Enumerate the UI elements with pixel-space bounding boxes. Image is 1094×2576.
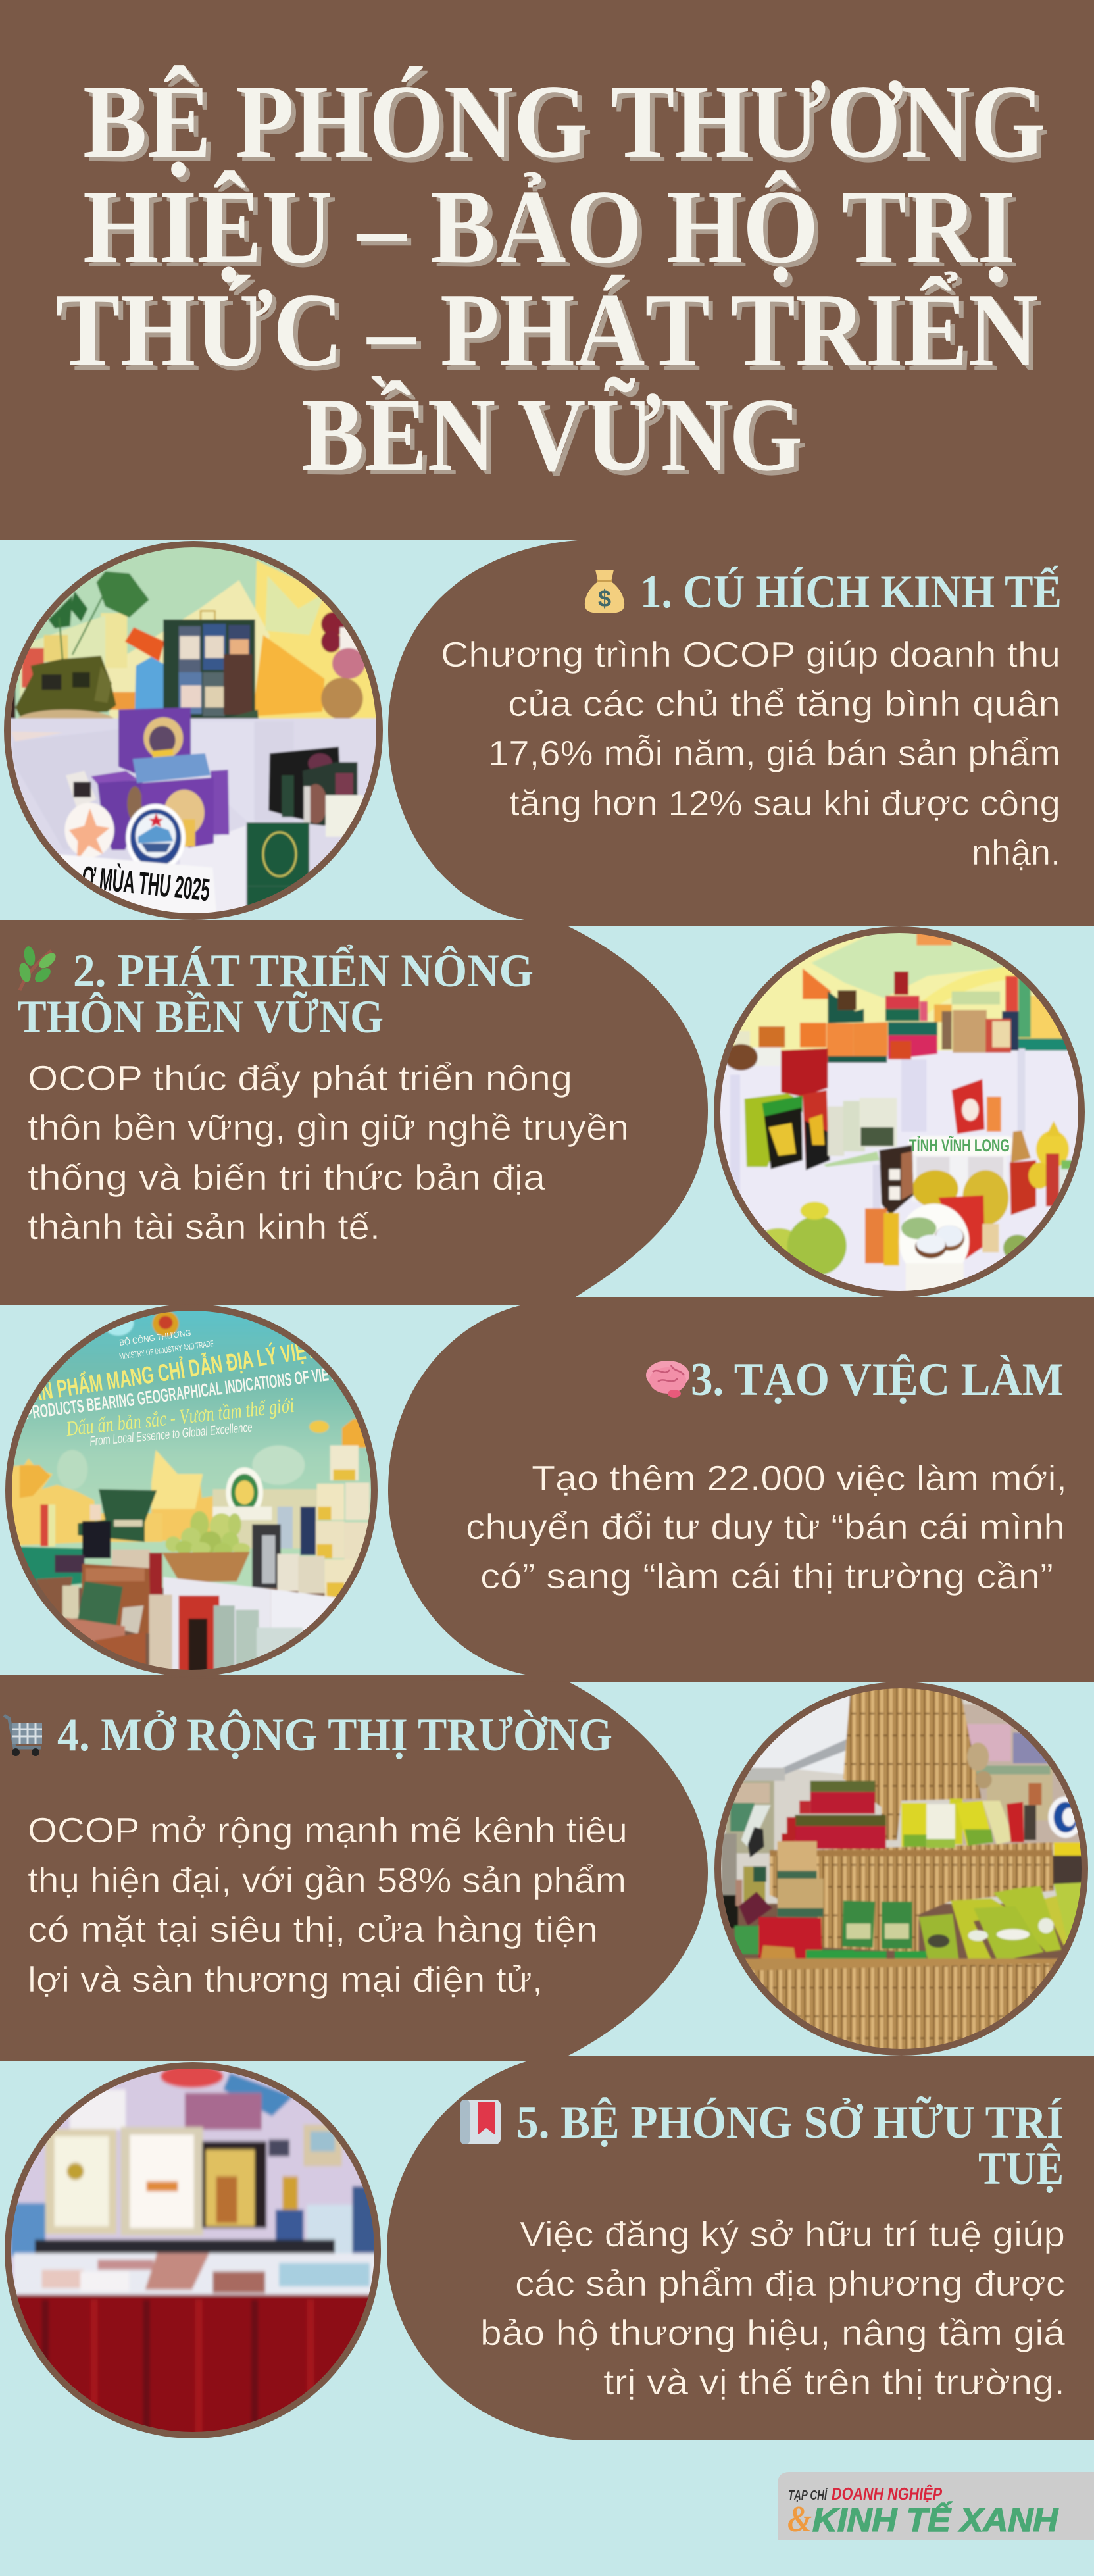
icon: leaf sprig xyxy=(17,946,59,990)
panel: section 5 intellectual property xyxy=(0,2059,1094,2442)
body text 2: thôn bền vững, gìn giữ nghề truyền xyxy=(28,1108,629,1148)
body text 1: nhận. xyxy=(972,833,1060,872)
title: THỨC – PHÁT TRIỂN xyxy=(55,270,1038,388)
photo 3 banner text xyxy=(24,1328,336,1449)
heading 3: 3. TẠO VIỆC LÀM xyxy=(691,1353,1064,1405)
band divider 2 xyxy=(0,1297,1094,1305)
photo 2 sign text: TỈNH VĨNH LONG xyxy=(909,1134,1010,1155)
body text 5 xyxy=(480,2215,1066,2402)
body text 2 xyxy=(28,1059,629,1247)
photo 3 banner text: ẢN PHẨM MANG CHỈ DẪN ĐỊA LÝ VIỆT xyxy=(28,1335,317,1407)
photo 1 sign text: Ơ MÙA THU 2025 xyxy=(80,859,212,908)
body text 4: OCOP mở rộng mạnh mẽ kênh tiêu xyxy=(28,1811,628,1850)
text pill 1 xyxy=(388,540,1094,920)
title band xyxy=(0,0,1094,540)
body text 3: Tạo thêm 22.000 việc làm mới, xyxy=(532,1459,1067,1498)
body text 3 xyxy=(466,1459,1067,1596)
photo 4: bamboo tower display xyxy=(712,1682,1094,2075)
text pill 4 xyxy=(0,1676,708,2056)
title: BỀN VỮNG xyxy=(306,380,807,497)
photo 3 banner text: BỘ CÔNG THƯƠNG xyxy=(118,1328,191,1348)
title: HIỆU – BẢO HỘ TRỊ xyxy=(83,168,1015,285)
title: HIỆU – BẢO HỘ TRỊ xyxy=(87,172,1020,290)
body text 1: 17,6% mỗi năm, giá bán sản phẩm xyxy=(488,734,1060,773)
body text 5: bảo hộ thương hiệu, nâng tầm giá xyxy=(480,2313,1066,2353)
body text 3: chuyển đổi tư duy từ “bán cái mình xyxy=(466,1507,1065,1547)
heading 5: TUỆ xyxy=(978,2142,1064,2194)
heading 5: 5. BỆ PHÓNG SỞ HỮU TRÍ xyxy=(516,2096,1064,2148)
heading 2: 2. PHÁT TRIỂN NÔNG xyxy=(73,944,534,997)
body text 5: các sản phẩm địa phương được xyxy=(515,2264,1065,2304)
body text 1: của các chủ thể tăng bình quân xyxy=(508,684,1060,724)
body text 4: lợi và sàn thương mại điện tử, xyxy=(28,1960,543,2000)
logo: Kinh te Xanh magazine: & xyxy=(787,2499,812,2540)
body text 1: tăng hơn 12% sau khi được công xyxy=(509,784,1060,823)
body text 1: Chương trình OCOP giúp doanh thu xyxy=(441,635,1060,674)
photo 3: geographical indications booth xyxy=(0,1303,388,1693)
body text 4: thụ hiện đại, với gần 58% sản phẩm xyxy=(28,1861,626,1900)
body text 3: có” sang “làm cái thị trường cần” xyxy=(480,1557,1053,1596)
panel: section 2 sustainable rural development xyxy=(0,926,1094,1314)
heading 2 xyxy=(17,944,534,1043)
icon: shopping cart xyxy=(4,1715,42,1756)
photo 5: certificates table xyxy=(0,2059,391,2442)
logo: Kinh te Xanh magazine: DOANH NGHIỆP xyxy=(832,2484,943,2504)
icon: book with bookmark xyxy=(460,2100,501,2144)
icon: brain xyxy=(646,1361,689,1398)
text pill 2 xyxy=(0,926,708,1297)
title xyxy=(55,63,1050,497)
logo: Kinh te Xanh magazine: TẠP CHÍ xyxy=(788,2488,829,2503)
photo 3 banner text: Dấu ấn bản sắc - Vươn tầm thế giới xyxy=(64,1393,295,1440)
panel: section 3 job creation xyxy=(0,1303,1094,1693)
body text 4 xyxy=(28,1811,628,2000)
icon: money bag xyxy=(585,570,624,613)
title: THỨC – PHÁT TRIỂN xyxy=(60,275,1043,393)
text pill 5 xyxy=(387,2061,1094,2440)
body text 1 xyxy=(441,635,1060,872)
heading 5 xyxy=(460,2096,1064,2194)
body text 2: thành tài sản kinh tế. xyxy=(28,1207,380,1247)
body text 2: thống và biến tri thức bản địa xyxy=(28,1158,546,1198)
panel: section 1 economic boost xyxy=(0,536,1094,926)
band divider 3 xyxy=(0,1675,1094,1682)
photo 3 banner text: PRODUCTS BEARING GEOGRAPHICAL INDICATIONS OF VIET xyxy=(24,1363,336,1423)
title: BỀN VỮNG xyxy=(301,375,803,493)
icon: money bag: $ xyxy=(598,585,611,612)
photo 3 banner text: From Local Essence to Global Excellence xyxy=(89,1420,253,1449)
text pill 3 xyxy=(388,1305,1094,1675)
body text 5: Việc đăng ký sở hữu trí tuệ giúp xyxy=(520,2215,1065,2254)
logo: Kinh te Xanh magazine: KINH TẾ XANH xyxy=(812,2502,1058,2538)
body text 5: trị và vị thế trên thị trường. xyxy=(603,2363,1065,2402)
body text 4: có mặt tại siêu thị, cửa hàng tiện xyxy=(28,1910,598,1950)
heading 4: 4. MỞ RỘNG THỊ TRƯỜNG xyxy=(57,1709,612,1761)
panel: section 4 market expansion xyxy=(0,1676,1094,2075)
photo 3 banner text: MINISTRY OF INDUSTRY AND TRADE xyxy=(118,1338,214,1361)
logo: Kinh te Xanh magazine xyxy=(778,2472,1094,2540)
heading 2: THÔN BỀN VỮNG xyxy=(18,990,384,1043)
photo 1: OCOP gift boxes xyxy=(0,536,388,920)
band divider 4 xyxy=(0,2056,1094,2061)
body text 2: OCOP thúc đẩy phát triển nông xyxy=(28,1059,572,1098)
band divider 1 xyxy=(0,920,1094,926)
heading 1: 1. CÚ HÍCH KINH TẾ xyxy=(640,565,1062,618)
photo 2: Vinh Long products xyxy=(714,926,1094,1314)
